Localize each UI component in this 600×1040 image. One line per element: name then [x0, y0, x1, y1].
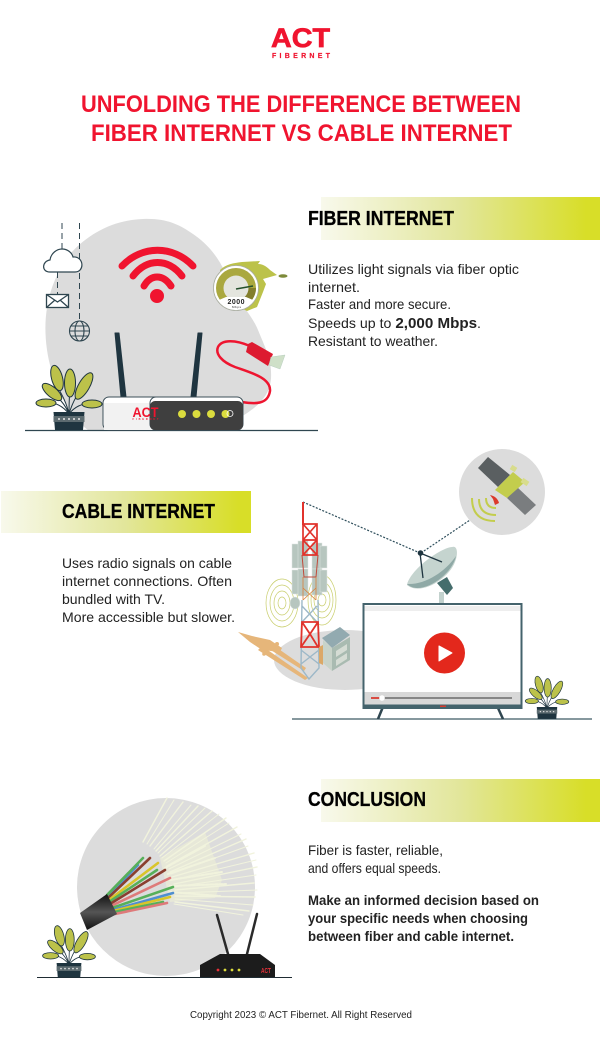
cable jacket — [80, 894, 117, 930]
banner: conclusion — [308, 779, 600, 822]
text: fiber internet description: Faster and more secure. — [308, 296, 451, 312]
text: fiber internet description: Speeds up to 2,000 Mbps. — [308, 315, 481, 332]
satellite signal — [472, 498, 496, 521]
lattice tower — [301, 502, 319, 679]
television — [363, 604, 522, 719]
signal rings — [266, 575, 336, 627]
tower shadow — [238, 632, 308, 680]
text: conclusion: and offers equal speeds. — [308, 860, 441, 876]
text: cable internet description: More accessible but slower. — [62, 609, 235, 625]
icon: cloud — [44, 249, 82, 272]
floor line — [292, 718, 592, 720]
satellite circle — [459, 449, 545, 535]
text: fiber internet description — [308, 261, 519, 349]
banner: fiber internet: FIBER INTERNET — [308, 208, 454, 230]
text: conclusion: Make an informed decision based on — [308, 892, 539, 908]
title: FIBER INTERNET VS CABLE INTERNET — [91, 120, 512, 147]
logo: ACT Fibernet: FIBERNET — [272, 53, 331, 60]
text: cable internet description — [62, 555, 235, 625]
text: cable internet description: Uses radio signals on cable — [62, 555, 232, 571]
icon: router: ACT — [132, 405, 159, 420]
icon: black router — [200, 914, 275, 977]
floor line — [37, 976, 292, 978]
satellite panels — [478, 457, 510, 487]
icon: black router: ACT — [261, 968, 272, 975]
satellite dish — [407, 547, 457, 604]
logo: ACT Fibernet: ACT — [271, 23, 331, 53]
text: fiber internet description: Resistant to weather. — [308, 333, 438, 349]
banner: conclusion: CONCLUSION — [308, 789, 426, 811]
icon: speedometer with flames — [214, 261, 288, 311]
text: fiber internet description: internet. — [308, 279, 360, 295]
icon: globe — [70, 321, 90, 341]
copyright footer: Copyright 2023 © ACT Fibernet. All Right Reserved — [190, 1009, 412, 1021]
text: cable internet description: bundled with TV. — [62, 591, 165, 607]
text: cable internet description: internet connections. Often — [62, 573, 232, 589]
dashed connector lines — [58, 223, 80, 320]
icon: router: FIBERNET — [132, 418, 159, 421]
grey circle — [77, 798, 255, 976]
illustration: fiber optic cable scene — [37, 798, 292, 978]
illustration: fiber router scene — [25, 219, 318, 430]
equipment cabinet — [319, 627, 350, 671]
pale fibre strands — [143, 798, 257, 915]
icon: speedometer with flames: 2000 — [228, 299, 245, 306]
icon: plant — [43, 925, 95, 977]
text: conclusion: Fiber is faster, reliable, — [308, 842, 443, 858]
satellite body — [495, 472, 525, 498]
banner: fiber internet — [308, 197, 600, 240]
colored fibres — [107, 858, 173, 914]
text: fiber internet description: Utilizes light signals via fiber optic — [308, 261, 519, 277]
text: conclusion — [308, 842, 539, 944]
icon: router — [103, 333, 243, 430]
background blob — [45, 219, 271, 430]
ground ellipse — [274, 630, 416, 690]
signal dotted lines — [303, 502, 470, 553]
icon: envelope — [46, 294, 68, 308]
banner: cable internet: CABLE INTERNET — [62, 501, 215, 523]
icon: wifi — [122, 250, 193, 300]
icon: speedometer with flames: Mbps — [232, 305, 242, 309]
illustration: tower, satellite and TV scene — [238, 449, 592, 719]
text: conclusion: between fiber and cable internet. — [308, 928, 514, 944]
banner: cable internet — [1, 491, 251, 533]
play button — [424, 632, 465, 674]
icon: small plant — [525, 675, 569, 719]
floor line — [25, 430, 318, 432]
icon: plant — [36, 364, 102, 430]
title — [81, 91, 521, 147]
icon: red ethernet cable — [217, 341, 285, 403]
antenna panels — [290, 541, 327, 609]
text: conclusion: your specific needs when choosing — [308, 910, 528, 926]
title: UNFOLDING THE DIFFERENCE BETWEEN — [81, 91, 521, 118]
